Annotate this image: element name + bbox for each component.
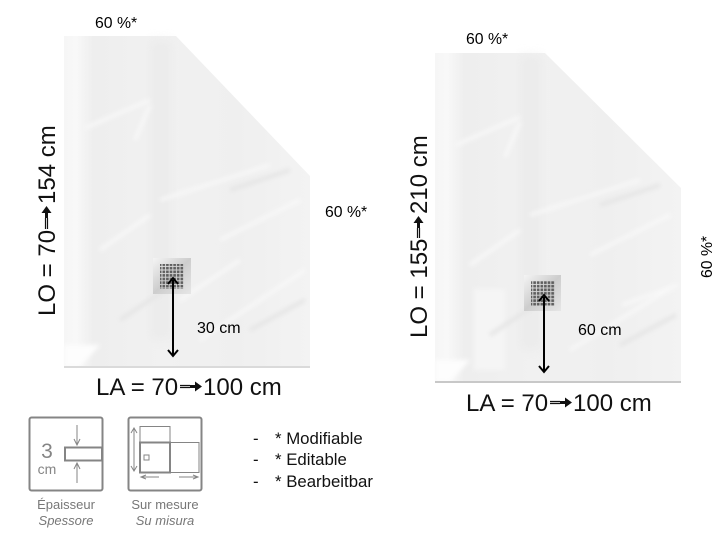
label: left width bbox=[96, 374, 282, 401]
label: left top percent: 60 %* bbox=[95, 15, 137, 32]
icon: thickness bbox=[30, 418, 102, 490]
caption: thickness: Épaisseur bbox=[37, 497, 96, 512]
caption: custom size bbox=[131, 497, 199, 528]
label: left length: 154 cm bbox=[34, 125, 61, 204]
list: modifiable note: * Bearbeitbar bbox=[275, 472, 373, 491]
list: modifiable note: - bbox=[253, 429, 259, 448]
label: right width bbox=[466, 390, 652, 417]
list: modifiable note: - bbox=[253, 450, 259, 469]
label: right length bbox=[406, 135, 433, 338]
caption: custom size: Su misura bbox=[136, 513, 194, 528]
label: left side percent: 60 %* bbox=[325, 204, 367, 221]
icon: right drain bbox=[524, 275, 561, 311]
label: left length bbox=[34, 125, 61, 316]
label: right width: LA = 70 bbox=[466, 390, 548, 417]
caption: thickness bbox=[37, 497, 96, 528]
icon: left drain bbox=[153, 258, 191, 294]
label: right side percent: 60 %* bbox=[699, 236, 716, 278]
panel: right shower tray bbox=[435, 53, 681, 383]
label: left width: LA = 70 bbox=[96, 374, 178, 401]
label: left width: 100 cm bbox=[203, 374, 282, 401]
arrow: right drain distance bbox=[539, 295, 549, 372]
list: modifiable note: * Modifiable bbox=[275, 429, 363, 448]
label: right width: 100 cm bbox=[573, 390, 652, 417]
icon: thickness: cm bbox=[38, 461, 56, 477]
label: right length: 210 cm bbox=[406, 135, 433, 214]
list: modifiable note: * Editable bbox=[275, 450, 347, 469]
label: left drain distance: 30 cm bbox=[197, 320, 241, 337]
label: right length: LO = 155 bbox=[406, 239, 433, 338]
panel: left shower tray bbox=[64, 36, 310, 368]
list: modifiable note: - bbox=[253, 472, 259, 491]
icon: custom size bbox=[128, 418, 202, 490]
label: left length: LO = 70 bbox=[34, 230, 61, 316]
label: right top percent: 60 %* bbox=[466, 31, 508, 48]
label: right drain distance: 60 cm bbox=[578, 322, 622, 339]
caption: custom size: Sur mesure bbox=[131, 497, 199, 512]
caption: thickness: Spessore bbox=[39, 513, 93, 528]
icon: thickness: 3 bbox=[41, 440, 53, 463]
list: modifiable note bbox=[253, 429, 373, 491]
arrow: left drain distance bbox=[168, 278, 178, 356]
